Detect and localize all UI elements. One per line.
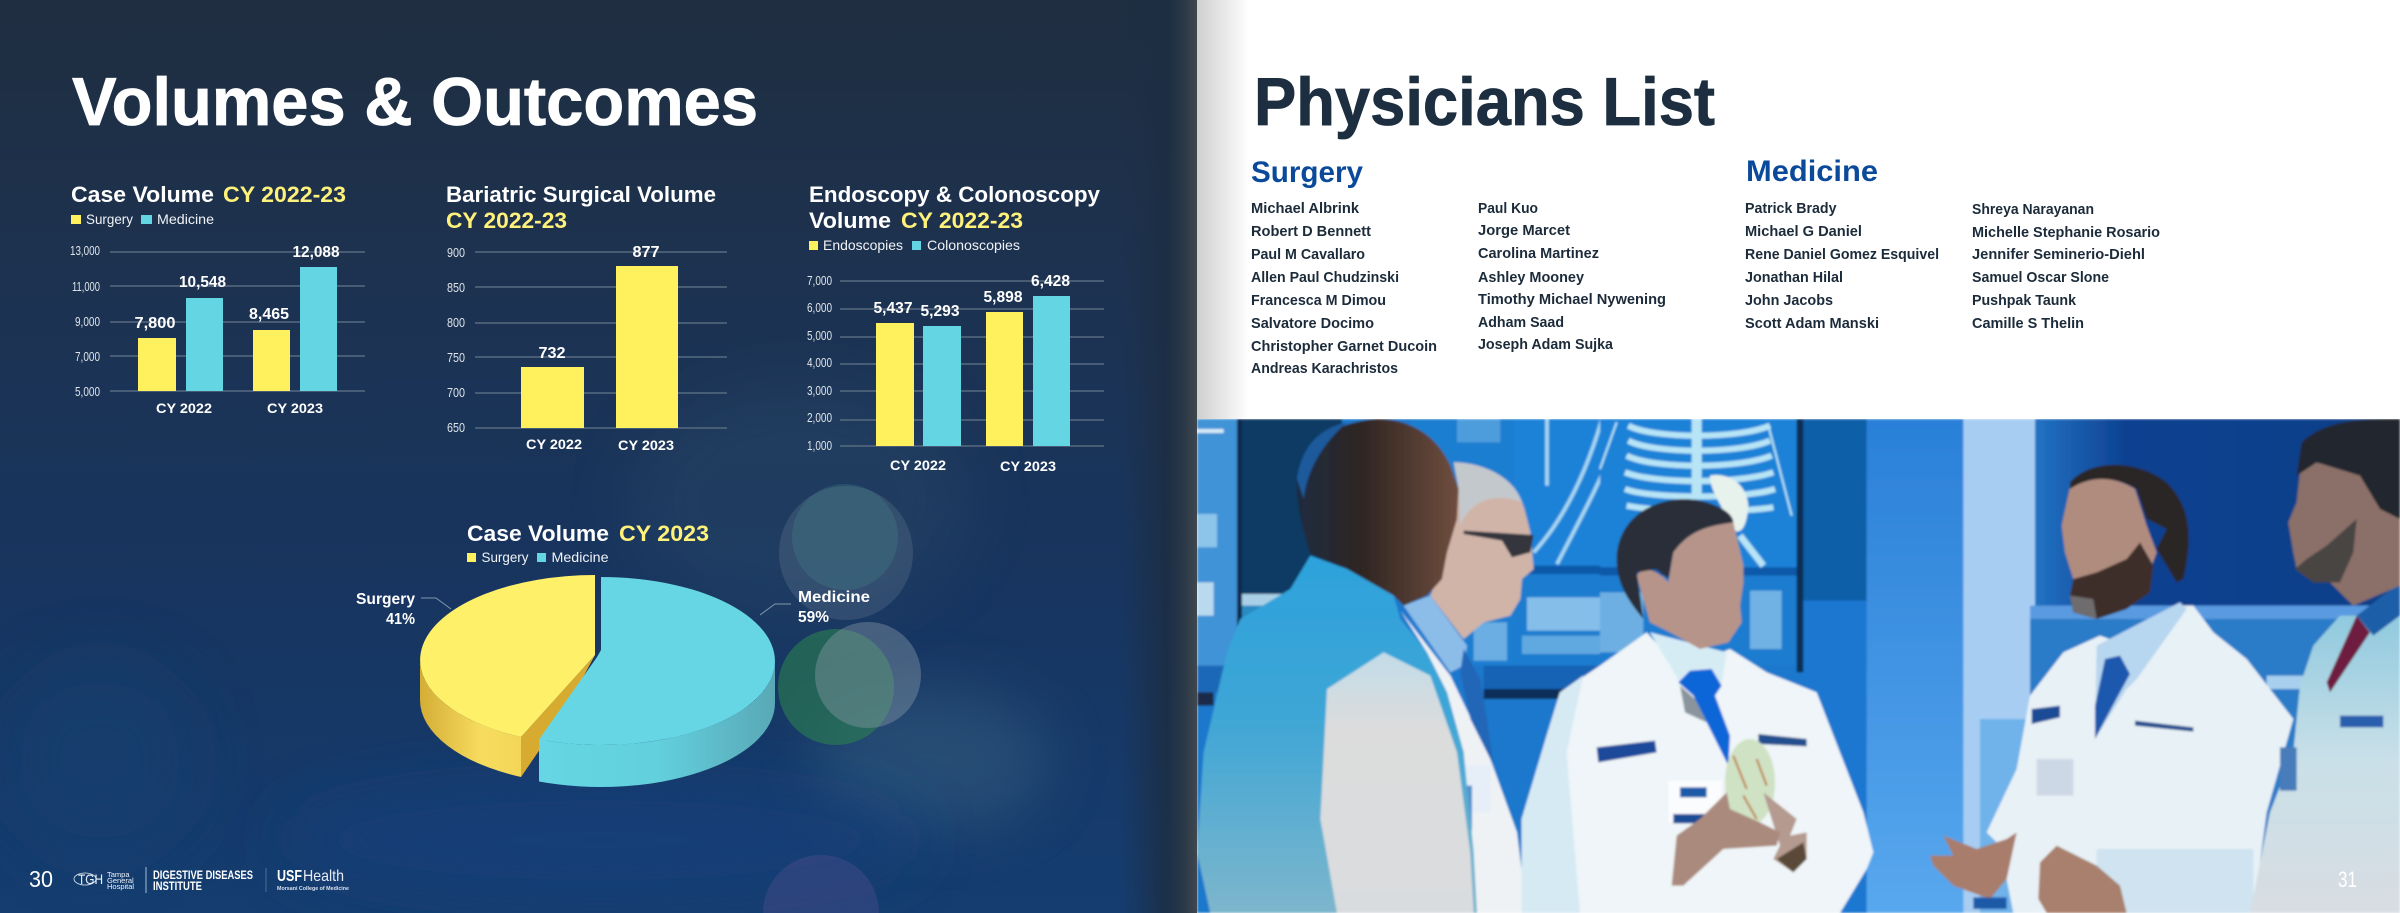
y axis labels: 13,000 — [70, 244, 100, 258]
value labels: 5,293 — [920, 303, 960, 320]
pie legend: Surgery — [482, 549, 528, 565]
names column 1: Michael G Daniel — [1745, 223, 1862, 240]
x axis labels — [156, 401, 324, 416]
names column 1: Rene Daniel Gomez Esquivel — [1745, 246, 1939, 263]
names column 1: Paul M Cavallaro — [1251, 246, 1365, 263]
chart heading — [446, 182, 716, 233]
y axis labels: 11,000 — [72, 280, 100, 294]
value labels — [134, 244, 340, 332]
label: medicine 59% — [760, 589, 870, 626]
x axis labels: CY 2023 — [1000, 459, 1057, 474]
y axis labels: 650 — [447, 421, 465, 435]
value labels: 877 — [632, 244, 660, 261]
value labels — [538, 244, 660, 362]
names column 2: Jorge Marcet — [1478, 222, 1570, 239]
names column 2 — [1478, 200, 1666, 353]
logo: USF Health: USF — [277, 868, 302, 885]
value labels: 5,437 — [874, 300, 913, 317]
man 4: bearded, gesturing — [1930, 465, 2293, 913]
chart heading — [71, 182, 346, 207]
names column 2: Joseph Adam Sujka — [1478, 336, 1614, 353]
y axis labels — [70, 244, 100, 399]
names column 2: Camille S Thelin — [1972, 315, 2084, 332]
x axis labels: CY 2022 — [890, 458, 946, 473]
yellow slice: surgery — [420, 575, 595, 777]
value labels: 8,465 — [249, 306, 289, 323]
chart heading: Volume — [809, 208, 891, 233]
y axis labels — [807, 274, 832, 453]
x axis labels — [526, 437, 675, 453]
names column 1: John Jacobs — [1745, 292, 1833, 309]
y axis labels: 5,000 — [75, 385, 100, 399]
names column 2: Michelle Stephanie Rosario — [1972, 224, 2160, 241]
names column 2: Shreya Narayanan — [1972, 201, 2094, 218]
man 2: glasses — [1400, 462, 1534, 913]
y axis labels: 800 — [447, 316, 465, 330]
chart: Case Volume CY 2022-23 bar chart — [70, 182, 365, 416]
chart: Endoscopy & Colonoscopy Volume bar chart — [807, 182, 1104, 474]
names column 1: Patrick Brady — [1745, 200, 1837, 217]
names column 2: Adham Saad — [1478, 314, 1564, 331]
names column 1: Michael Albrink — [1251, 200, 1360, 217]
value labels: 732 — [538, 345, 566, 362]
y axis labels: 9,000 — [75, 315, 100, 329]
y axis labels: 4,000 — [807, 356, 832, 370]
chart heading: Bariatric Surgical Volume — [446, 182, 716, 207]
value labels: 12,088 — [292, 244, 340, 261]
chart heading: CY 2022-23 — [223, 182, 346, 207]
x axis labels — [890, 458, 1057, 474]
panel: left page background — [0, 0, 1197, 913]
y axis labels: 700 — [447, 386, 465, 400]
label: surgery 41% — [356, 591, 451, 628]
y axis labels: 7,000 — [807, 274, 832, 288]
man 3: centre, holding model — [1522, 499, 1873, 913]
man 5: far right — [2250, 419, 2400, 913]
logo: Tampa General Hospital — [74, 867, 146, 893]
panel: right page white background — [1197, 0, 2400, 419]
y axis labels: 6,000 — [807, 301, 832, 315]
legend — [71, 211, 214, 227]
bars — [876, 296, 1070, 446]
label: surgery 41%: Surgery — [356, 591, 415, 608]
man 1: back to camera — [1197, 419, 1477, 913]
list: Medicine physicians — [1745, 155, 2160, 332]
chart: Case Volume CY 2023 3D pie — [356, 521, 870, 787]
chart heading: Case Volume — [71, 182, 214, 207]
pie legend: Medicine — [552, 549, 609, 565]
names column 2: Carolina Martinez — [1478, 245, 1599, 262]
value labels: 5,898 — [984, 289, 1023, 306]
y axis labels: 7,000 — [75, 350, 100, 364]
logo: USF Health — [277, 868, 349, 892]
logo: USF Health: Health — [303, 868, 344, 885]
chart heading — [809, 182, 1101, 233]
y axis labels: 5,000 — [807, 329, 832, 343]
logo: Digestive Diseases Institute: INSTITUTE — [153, 881, 202, 893]
logo: Tampa General Hospital: TGH — [78, 871, 103, 887]
y axis labels — [447, 246, 465, 435]
y axis labels: 1,000 — [807, 439, 832, 453]
chart heading: CY 2022-23 — [446, 208, 567, 233]
label: medicine 59%: 59% — [798, 609, 829, 626]
logo: Tampa General Hospital: Tampa — [107, 870, 130, 879]
value labels: 6,428 — [1031, 273, 1070, 290]
names column 1: Scott Adam Manski — [1745, 315, 1879, 332]
label: medicine 59%: Medicine — [798, 589, 870, 606]
names column 2: Timothy Michael Nywening — [1478, 291, 1666, 308]
value labels — [874, 273, 1070, 320]
names column 1 — [1251, 200, 1437, 377]
list: Surgery physicians — [1251, 156, 1666, 377]
names column 2: Paul Kuo — [1478, 200, 1538, 217]
names column 1: Allen Paul Chudzinski — [1251, 269, 1399, 286]
pie legend — [467, 549, 609, 565]
page number 31: 31 — [2338, 867, 2357, 892]
logo: Tampa General Hospital: General — [107, 876, 134, 885]
names column 1: Christopher Garnet Ducoin — [1251, 338, 1437, 355]
chart heading: Endoscopy & Colonoscopy — [809, 182, 1101, 207]
title: Volumes & Outcomes: Volumes & Outcomes — [72, 64, 758, 140]
chart: Bariatric Surgical Volume bar chart — [446, 182, 727, 453]
legend: Medicine — [157, 211, 214, 227]
heading: Medicine: Medicine — [1746, 155, 1878, 188]
names column 2: Samuel Oscar Slone — [1972, 269, 2109, 286]
pie heading: Case Volume — [467, 521, 609, 546]
names column 1: Salvatore Docimo — [1251, 315, 1374, 332]
legend — [809, 237, 1020, 253]
chart heading: CY 2022-23 — [901, 208, 1023, 233]
logo: Digestive Diseases Institute — [153, 868, 266, 893]
page number 30: 30 — [29, 866, 53, 892]
names column 2 — [1972, 201, 2160, 332]
names column 2: Ashley Mooney — [1478, 269, 1585, 286]
value labels: 10,548 — [179, 274, 226, 291]
x axis labels: CY 2022 — [526, 437, 582, 452]
y axis labels: 750 — [447, 351, 465, 365]
x axis labels: CY 2023 — [267, 401, 324, 416]
names column 1: Robert D Bennett — [1251, 223, 1371, 240]
pie heading: CY 2023 — [619, 521, 709, 546]
names column 1: Jonathan Hilal — [1745, 269, 1843, 286]
y axis labels: 2,000 — [807, 411, 832, 425]
y axis labels: 850 — [447, 281, 465, 295]
photo: physicians in white coats in front of a medical screen — [1197, 419, 2400, 913]
logo: Digestive Diseases Institute: DIGESTIVE DISEASES — [153, 870, 253, 882]
pie heading — [467, 521, 709, 546]
names column 1: Andreas Karachristos — [1251, 360, 1398, 377]
legend: Colonoscopies — [927, 237, 1020, 253]
legend: Endoscopies — [823, 237, 903, 253]
footer: page number and logos — [29, 866, 349, 893]
y axis labels: 3,000 — [807, 384, 832, 398]
names column 1 — [1745, 200, 1939, 332]
x axis labels: CY 2022 — [156, 401, 212, 416]
legend: Surgery — [86, 211, 133, 227]
bars — [521, 266, 678, 428]
x axis labels: CY 2023 — [618, 438, 675, 453]
names column 1: Francesca M Dimou — [1251, 292, 1386, 309]
cyan slice: medicine — [539, 577, 775, 787]
names column 2: Pushpak Taunk — [1972, 292, 2077, 309]
logo: Tampa General Hospital: Hospital — [107, 882, 134, 891]
value labels: 7,800 — [134, 315, 176, 332]
y axis labels: 900 — [447, 246, 465, 260]
heading: Surgery: Surgery — [1251, 156, 1363, 189]
bars — [138, 267, 337, 391]
logo: USF Health: Morsani College of Medicine — [277, 886, 349, 892]
label: surgery 41%: 41% — [386, 611, 415, 628]
title: Physicians List: Physicians List — [1254, 64, 1715, 140]
names column 2: Jennifer Seminerio-Diehl — [1972, 246, 2145, 263]
